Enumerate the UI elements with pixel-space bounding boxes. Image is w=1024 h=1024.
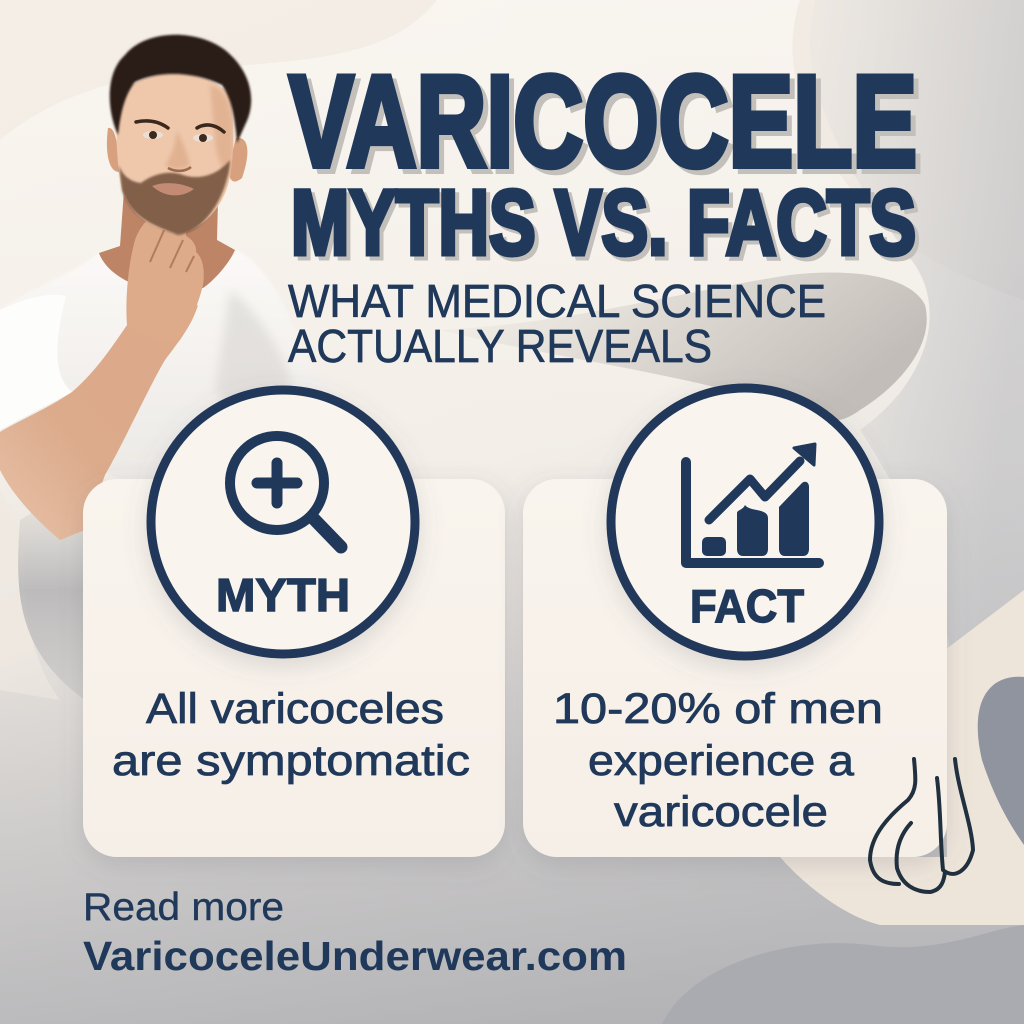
fact badge: [611, 388, 879, 656]
man: forearm: [0, 305, 198, 540]
man: eyes and brows: [136, 121, 224, 171]
myth text: [112, 685, 470, 785]
man: white t-shirt: [0, 250, 345, 480]
man: face: [117, 74, 233, 234]
read more footer: [83, 886, 627, 979]
fact text: [553, 685, 883, 836]
read more footer: VaricoceleUnderwear.com: [83, 933, 627, 979]
icon: anatomical outline: [870, 759, 973, 892]
fact text: varicocele: [614, 788, 828, 836]
man: neck: [99, 190, 235, 291]
myth text: All varicoceles: [146, 685, 444, 733]
man: hand on chin: [126, 213, 204, 341]
man: hair: [110, 35, 251, 143]
panel: myth: [83, 390, 505, 857]
myth text: are symptomatic: [112, 737, 470, 785]
subtitle: [288, 275, 826, 372]
title: [289, 48, 922, 278]
man: beard: [119, 160, 230, 235]
fact text: experience a: [588, 737, 854, 785]
myth label: MYTH: [216, 569, 350, 621]
man portrait: [0, 35, 345, 540]
icon: magnifying glass: [230, 436, 341, 547]
man: ears: [107, 128, 247, 182]
subtitle: ACTUALLY REVEALS: [288, 320, 712, 372]
fact label: FACT: [690, 580, 804, 632]
panel: fact: [523, 388, 947, 857]
subtitle: WHAT MEDICAL SCIENCE: [288, 275, 826, 327]
fact text: 10-20% of men: [553, 685, 883, 733]
icon: rising chart: [686, 444, 819, 563]
myth badge: [151, 390, 415, 654]
read more footer: Read more: [83, 886, 284, 929]
